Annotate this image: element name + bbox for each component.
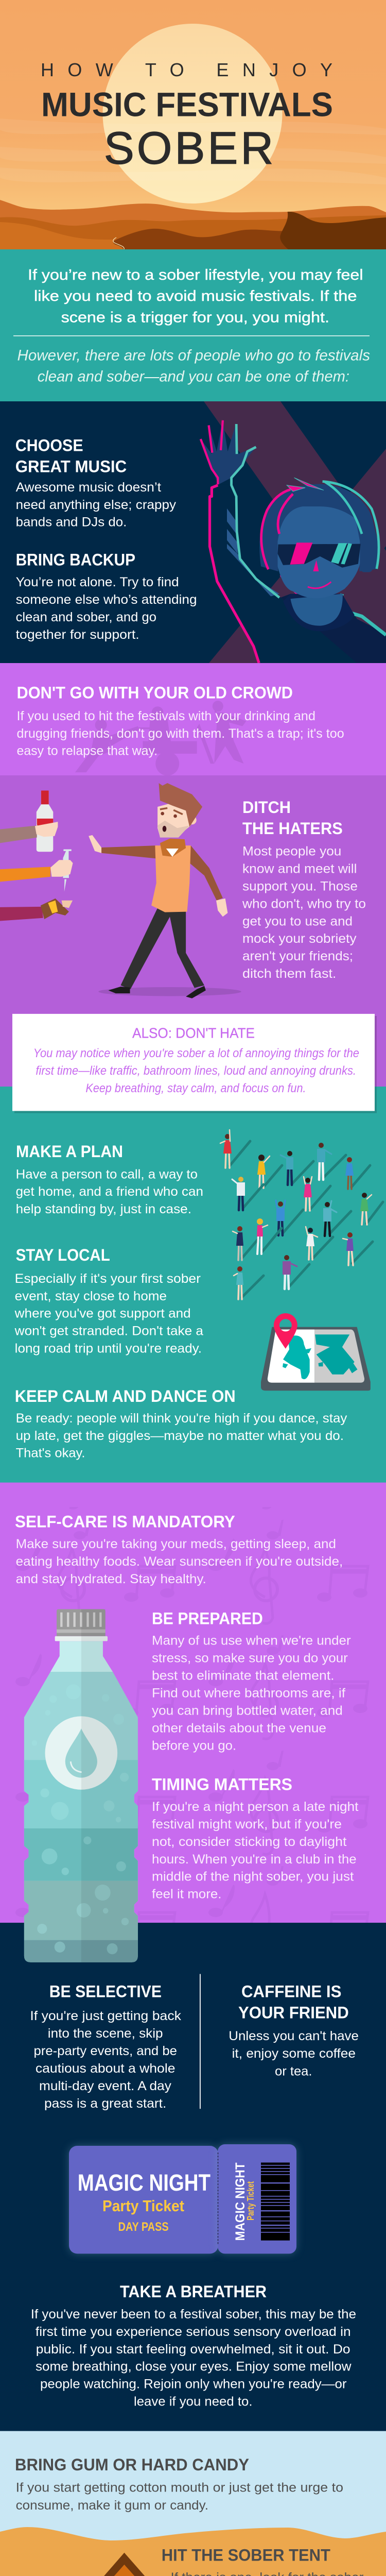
barcode	[261, 2163, 290, 2241]
text: be prepared	[152, 1634, 351, 1753]
text: keep calm: up late, get the giggles—maybe no matter what you do.	[16, 1429, 344, 1443]
heading: timing matters: TIMING MATTERS	[152, 1775, 292, 1793]
teal background	[0, 1087, 386, 1483]
text: be selective: If you're just getting back	[30, 2009, 182, 2023]
text: caffeine: or tea.	[275, 2064, 312, 2078]
light blue background	[0, 2431, 386, 2545]
heading: caffeine	[238, 1982, 349, 2022]
band silhouettes	[75, 701, 246, 775]
intro statement: scene is a trigger for you, you might.	[61, 309, 329, 326]
illustration: tablet map with location pin	[261, 1313, 371, 1391]
panel: self-care	[0, 1483, 386, 1923]
text: self-care	[16, 1537, 343, 1586]
text: be selective	[30, 2009, 182, 2111]
desert dunes	[0, 200, 386, 249]
heading: caffeine: YOUR FRIEND	[238, 2003, 349, 2022]
cloud streaks	[0, 118, 386, 184]
panel: bring gum	[0, 2431, 386, 2545]
heading: choose great music	[15, 436, 127, 476]
text: be prepared: Find out where bathrooms are, if	[152, 1686, 345, 1700]
text: old crowd	[16, 709, 344, 758]
heading: take a breather: TAKE A BREATHER	[120, 2282, 267, 2301]
panel: make a plan, stay local, keep calm	[0, 1087, 386, 1483]
navy background	[0, 1923, 386, 2431]
text: old crowd: easy to relapse that way.	[16, 744, 157, 758]
italic intro: However, there are lots of people who go to festivals	[17, 347, 370, 364]
text: old crowd: If you used to hit the festivals with your drinking and	[16, 709, 315, 723]
panel: selective, caffeine, ticket, breather	[0, 1923, 386, 2431]
text: choose great music: Awesome music doesn’t	[16, 480, 161, 495]
text: bring backup: together for support.	[16, 628, 139, 642]
text: be prepared: stress, so make sure you do your	[152, 1651, 348, 1666]
sky background	[0, 0, 386, 249]
text: stay local: where you've got support and	[14, 1307, 191, 1321]
text: ditch the haters: support you. Those	[242, 879, 358, 893]
heading: be prepared: BE PREPARED	[152, 1609, 263, 1628]
illustration: party ticket: MAGIC NIGHT	[233, 2163, 248, 2241]
text: self-care: and stay hydrated. Stay healthy.	[16, 1572, 206, 1586]
title	[41, 59, 333, 173]
illustration: party ticket	[69, 2144, 296, 2253]
text: ditch the haters: get you to use and	[242, 914, 353, 928]
text: make a plan: Have a person to call, a way to	[16, 1167, 198, 1181]
text: ditch the haters	[242, 844, 366, 981]
text: make a plan: get home, and a friend who can	[16, 1184, 203, 1199]
heading: sober tent: HIT THE SOBER TENT	[162, 2546, 330, 2564]
text: be selective: into the scene, skip	[48, 2026, 163, 2041]
text: timing matters: not, consider sticking to daylight	[152, 1835, 346, 1849]
text: bring backup	[16, 575, 197, 642]
callout text	[33, 1046, 359, 1095]
text: gum: consume, make it gum or candy.	[16, 2498, 208, 2513]
teal background	[0, 249, 386, 402]
illustration: man pushing away	[89, 783, 241, 998]
illustration: DJ fan with headphones	[201, 420, 386, 663]
text: timing matters	[152, 1800, 358, 1902]
heading: gum: BRING GUM OR HARD CANDY	[15, 2455, 249, 2474]
text: bring backup: someone else who’s attending	[16, 592, 197, 607]
panel: great music and backup	[0, 401, 386, 663]
heading: old crowd: DON'T GO WITH YOUR OLD CROWD	[16, 684, 293, 702]
text: make a plan: help standing by, just in case.	[16, 1202, 191, 1216]
text: be prepared: before you go.	[152, 1738, 236, 1753]
text: be prepared: Many of us use when we're under	[152, 1634, 351, 1648]
illustration: party ticket: Party Ticket	[245, 2181, 256, 2221]
text: timing matters: hours. When you're in a club in the	[152, 1852, 357, 1867]
text: take a breather: some breathing, close your eyes. Enjoy some mellow	[36, 2360, 352, 2374]
intro statement: like you need to avoid music festivals. If the	[34, 288, 357, 304]
heading: ditch the haters: DITCH	[242, 798, 291, 817]
panel: ditch the haters	[0, 775, 386, 1087]
text: ditch the haters: aren't your friends;	[242, 949, 353, 963]
heading: ditch the haters	[242, 798, 343, 838]
text: choose great music: need anything else; crappy	[16, 498, 177, 512]
text: keep calm: Be ready: people will think you're high if you dance, stay	[16, 1411, 347, 1426]
heading: be selective: BE SELECTIVE	[49, 1982, 162, 2001]
callout text: Keep breathing, stay calm, and focus on fun.	[85, 1081, 306, 1095]
illustration: party ticket: MAGIC NIGHT	[78, 2170, 210, 2196]
sand background with wavy edge	[0, 2527, 386, 2576]
text: be selective: pass is a great start.	[44, 2096, 166, 2111]
italic intro: clean and sober—and you can be one of them:	[38, 368, 349, 385]
heading: stay local: STAY LOCAL	[16, 1246, 110, 1264]
text: be selective: pre-party events, and be	[34, 2044, 177, 2058]
heading: make a plan: MAKE A PLAN	[16, 1142, 123, 1161]
text: choose great music: bands and DJs do.	[16, 515, 127, 530]
text: take a breather	[31, 2307, 356, 2409]
text: caffeine: it, enjoy some coffee	[232, 2046, 356, 2061]
text: take a breather: people watching. Rejoin only when you're ready—or	[40, 2377, 347, 2392]
purple background	[0, 1483, 386, 1923]
callout box	[12, 1014, 375, 1111]
text: be prepared: other details about the venue	[152, 1721, 326, 1735]
heading: self-care: SELF-CARE IS MANDATORY	[15, 1512, 235, 1531]
text: be selective: cautious about a whole	[36, 2061, 176, 2076]
text: ditch the haters: who don't, who try to	[242, 896, 366, 911]
heading: keep calm: KEEP CALM AND DANCE ON	[15, 1387, 236, 1405]
panel: sober tent	[0, 2527, 386, 2576]
illustration: crowd of dancers	[220, 1130, 383, 1299]
text: stay local	[14, 1272, 203, 1356]
text: choose great music	[16, 480, 177, 530]
text: timing matters: festival might work, but if you're	[152, 1817, 342, 1832]
navy background	[0, 401, 386, 663]
heading: choose great music: CHOOSE	[15, 436, 83, 454]
diagonal light beams	[204, 401, 386, 663]
text: timing matters: If you're a night person a late night	[152, 1800, 358, 1814]
heading: caffeine: CAFFEINE IS	[241, 1982, 341, 2001]
heading: bring backup: BRING BACKUP	[16, 550, 135, 569]
callout text: You may notice when you're sober a lot of annoying things for the	[33, 1046, 359, 1060]
text: take a breather: first time you experience serious sensory overload in	[36, 2325, 351, 2339]
title: HOW TO ENJOY	[41, 59, 332, 80]
heading: choose great music: GREAT MUSIC	[15, 457, 127, 476]
text: be prepared: best to eliminate that element.	[152, 1669, 335, 1683]
text: take a breather: If you've never been to a festival sober, this may be the	[31, 2307, 356, 2321]
title: MUSIC FESTIVALS	[41, 85, 333, 123]
panel: hero	[0, 0, 386, 249]
text: stay local: Especially if it's your first sober	[15, 1272, 201, 1286]
sun	[103, 24, 282, 204]
illustration: hands offering bottle, syringe and pills	[0, 791, 73, 921]
text: be prepared: you can bring bottled water, and	[152, 1703, 343, 1718]
text: stay local: event, stay close to home	[15, 1289, 167, 1303]
callout heading: ALSO: DON'T HATE	[132, 1025, 255, 1041]
panel: old crowd	[0, 663, 386, 776]
text: make a plan	[16, 1167, 203, 1216]
text: ditch the haters: ditch them fast.	[242, 967, 336, 981]
text: take a breather: leave if you need to.	[134, 2395, 252, 2409]
text: self-care: Make sure you're taking your meds, getting sleep, and	[16, 1537, 336, 1551]
illustration: tent	[7, 2553, 242, 2576]
heading: ditch the haters: THE HATERS	[242, 819, 343, 838]
text: gum: If you start getting cotton mouth or just get the urge to	[16, 2481, 343, 2495]
text: caffeine	[229, 2029, 359, 2078]
callout shadow	[14, 1016, 377, 1113]
text: stay local: won't get stranded. Don't take a	[14, 1324, 203, 1338]
callout text: first time—like traffic, bathroom lines, loud and annoying drunks.	[36, 1064, 356, 1078]
text: ditch the haters: mock your sobriety	[242, 931, 357, 946]
text: timing matters: feel it more.	[152, 1887, 221, 1902]
dark purple background	[0, 775, 386, 1087]
text: bring backup: clean and sober, and go	[16, 610, 156, 624]
text: caffeine: Unless you can't have	[229, 2029, 359, 2043]
italic intro	[17, 347, 370, 385]
illustration: party ticket: DAY PASS	[118, 2220, 169, 2234]
text: bring backup: You’re not alone. Try to find	[16, 575, 179, 589]
purple background	[0, 663, 386, 776]
text: keep calm: That's okay.	[16, 1446, 85, 1461]
text: stay local: long road trip until you're ready.	[15, 1342, 202, 1356]
intro statement: If you’re new to a sober lifestyle, you may feel	[28, 267, 363, 283]
title: SOBER	[104, 123, 273, 173]
panel: introduction	[0, 249, 386, 402]
text: be selective: multi-day event. A day	[39, 2079, 171, 2093]
panel: also don't hate callout	[12, 1014, 377, 1113]
intro statement	[28, 267, 363, 326]
text: ditch the haters: know and meet will	[242, 861, 357, 876]
text: ditch the haters: Most people you	[242, 844, 341, 859]
text: gum	[16, 2481, 343, 2513]
text: take a breather: public. If you start feeling overwhelmed, sit it out. Do	[36, 2342, 350, 2357]
text: old crowd: drugging friends, don't go with them. That's a trap; it's too	[16, 726, 344, 741]
text: timing matters: middle of the night sober, you just	[152, 1870, 354, 1884]
illustration: water bottle	[24, 1609, 138, 1962]
illustration: party ticket: Party Ticket	[102, 2197, 184, 2215]
text: self-care: eating healthy foods. Wear sunscreen if you're outside,	[16, 1554, 343, 1569]
text: keep calm	[16, 1411, 347, 1461]
